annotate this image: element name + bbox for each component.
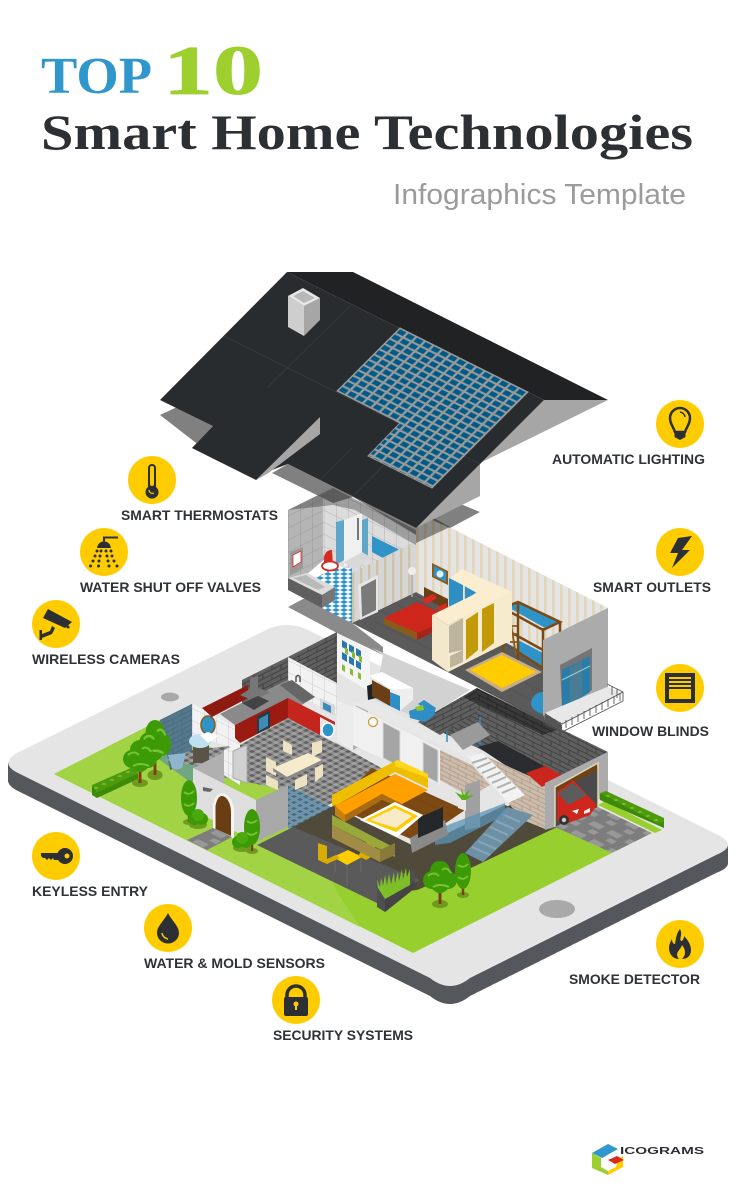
counter [220,680,315,725]
bookcase wall [337,633,370,692]
terrace [257,827,420,906]
bathroom tile wall [192,703,240,750]
bedroom window [449,578,477,607]
roof shadow left [160,401,222,463]
mirror [201,716,215,734]
roof shadow right [428,503,480,528]
interior doors [383,722,400,767]
checker floor [165,718,385,827]
oven [257,710,270,734]
floor lamp [408,567,416,597]
small gable [256,417,320,480]
icon: water drop [157,913,179,944]
shadow floor [293,805,557,892]
feature: wireless cameras: WIRELESS CAMERAS [32,651,180,667]
entry front wall [193,768,256,842]
bathtub [288,573,335,608]
washer [320,717,335,743]
sofa [332,760,428,822]
car roof [526,766,562,787]
clock [368,718,378,726]
heading: smart home technologies: Smart Home Technologies [41,104,693,160]
feature: automatic lighting [552,400,705,467]
upper brick wall [288,632,337,685]
blue tinted floor [288,785,333,830]
feature: water shut off valves: WATER SHUT OFF VALVES [80,579,261,595]
toilet bucket [168,753,186,770]
feature: security systems [272,976,413,1043]
wood floor [333,768,465,842]
interior door [233,745,247,783]
feature: water shut off valves [80,528,261,595]
shadow on bathroom wall [288,488,416,545]
lawn [54,720,612,953]
green sofa [332,815,395,862]
heading: top 10 [41,33,263,110]
bottom button [539,900,575,918]
bathroom glass [160,704,212,782]
feature: smart outlets [593,528,711,595]
desk [367,672,413,711]
upper kitchen cabinets [202,685,248,717]
wardrobe [432,569,512,672]
feature: keyless entry [32,832,149,899]
left lower cabinets [235,698,288,743]
sink [189,732,218,763]
icon: camera [40,609,72,640]
feature: water and mold sensors: WATER & MOLD SENSORS [144,955,325,971]
dark driveway strip [478,741,555,785]
feature: window blinds [592,664,709,739]
roof [160,272,608,545]
car [557,780,597,825]
bed [384,587,452,640]
shadow under balcony [463,688,557,735]
microwave [320,698,335,716]
feature: water and mold sensors [144,904,325,971]
feature: automatic lighting: AUTOMATIC LIGHTING [552,451,705,467]
shelves [447,717,490,750]
title [41,33,693,211]
bedroom door [358,575,378,620]
icon: padlock [284,986,308,1016]
window [560,648,592,710]
stairs upper [468,753,525,803]
solar panels [337,328,528,488]
garage frame [545,752,608,830]
icon: light bulb [670,408,690,440]
towel radiator [290,547,303,575]
striped wall left [352,541,416,623]
beige brick wall [440,750,490,797]
security camera [203,787,213,792]
chimney [288,288,320,336]
terrace table [318,838,375,885]
dark ridge band [287,272,608,400]
stove [242,696,269,710]
heading: top 10: 10 [163,33,263,110]
feature: smart thermostats [121,456,278,523]
feature: security systems: SECURITY SYSTEMS [273,1027,413,1043]
icon: shower [89,538,118,568]
front door [213,793,234,839]
column [465,780,480,830]
striped wall back [416,510,608,700]
icon: key [41,848,73,864]
shadow on striped wall [416,508,450,543]
rug [360,802,423,837]
study floor [372,648,470,718]
entry pavement [187,828,232,850]
hedge left [92,767,138,798]
upper floor [288,488,623,732]
bath screen [372,536,400,558]
feature: smoke detector [569,920,704,987]
trees [123,720,471,908]
white tile kitchen wall [288,657,337,715]
tablet base [8,625,728,1004]
kitchen back brick wall [242,657,288,725]
shower [336,513,372,570]
hedge right [598,791,664,833]
left back brick wall [160,704,192,770]
end wall [543,608,608,716]
sofa chair [409,700,436,722]
feature: wireless cameras [32,600,180,667]
blue chair [531,692,543,714]
left slab [288,598,383,655]
beige wall behind stairs [485,756,545,829]
main roof [160,272,544,528]
plant [455,788,474,811]
toilet [322,550,338,570]
feature: window blinds: WINDOW BLINDS [592,723,709,739]
stairs lower [465,807,533,862]
kitchen sink [280,680,315,703]
rug [465,652,542,692]
roof shadow centre [272,464,416,535]
seam lines [224,304,480,496]
gable side [416,400,608,528]
blue tile floor [316,568,352,623]
icon: lightning bolt [670,536,692,568]
entry side wall [256,785,288,842]
feature: smart outlets: SMART OUTLETS [593,579,711,595]
top button [161,692,179,702]
range hood [240,676,270,701]
entry side wall tile [224,743,240,785]
bunk bed [503,602,560,670]
faucet [296,676,300,682]
right lower cabinets [288,698,335,743]
white long wall [353,700,480,785]
fridge [337,700,368,750]
icon: blinds [665,673,695,703]
balcony [545,684,623,732]
entry inner wall [193,752,224,786]
feature: keyless entry: KEYLESS ENTRY [32,883,149,899]
logo: icograms [592,1144,705,1175]
picture [432,563,448,585]
bathroom walls [288,488,332,590]
dining table [266,740,323,790]
icon: thermometer [146,464,158,499]
feature: smart thermostats: SMART THERMOSTATS [121,507,278,523]
feature: smoke detector: SMOKE DETECTOR [569,971,700,987]
subtitle: Infographics Template [393,179,686,211]
ground floor [92,632,664,912]
planks floor [352,592,545,722]
driveway [555,807,652,853]
glass railing [435,803,505,845]
icon: flame [669,929,691,959]
logo: icograms: ICOGRAMS [620,1146,705,1157]
planter [377,868,415,912]
garage back brick wall [418,688,608,783]
heading: top 10: TOP [41,48,152,105]
tv [410,807,448,853]
